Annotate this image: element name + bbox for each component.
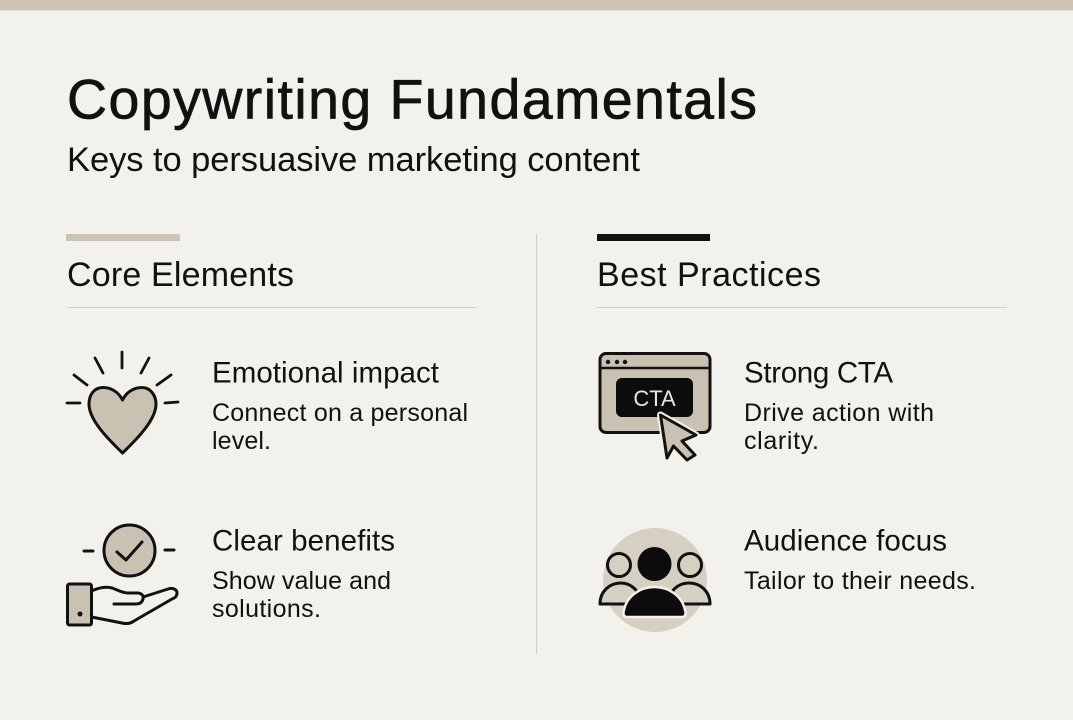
section accent rule: core elements — [66, 234, 180, 241]
section accent rule: best practices — [597, 234, 710, 241]
item: emotional impact: Emotional impact — [212, 356, 439, 390]
heading: best practices: Best Practices — [597, 256, 821, 294]
title: Copywriting Fundamentals — [67, 68, 757, 130]
item: audience focus: Tailor to their needs. — [744, 567, 976, 595]
icon: heart with rays — [67, 352, 178, 453]
icon: audience group — [600, 528, 710, 632]
icon: hand holding check — [68, 525, 177, 625]
item: clear benefits: Clear benefits — [212, 524, 395, 558]
item: clear benefits: solutions. — [212, 595, 321, 623]
item: clear benefits — [212, 524, 395, 623]
item: audience focus — [744, 524, 976, 595]
column divider — [536, 234, 537, 654]
item: emotional impact — [212, 356, 468, 455]
subtitle: Keys to persuasive marketing content — [67, 141, 640, 179]
panel: core elements — [66, 234, 477, 625]
icon: CTA browser window with cursor — [600, 354, 710, 460]
item: strong CTA: Drive action with — [744, 399, 934, 427]
item: strong CTA: clarity. — [744, 427, 819, 455]
heading: core elements: Core Elements — [67, 256, 294, 294]
top accent bar — [0, 0, 1073, 10]
item: strong CTA: Strong CTA — [744, 356, 893, 390]
item: emotional impact: level. — [212, 427, 271, 455]
item: emotional impact: Connect on a personal — [212, 399, 468, 427]
panel: best practices — [597, 234, 1007, 632]
icon: CTA browser window with cursor: CTA — [633, 386, 676, 411]
item: audience focus: Audience focus — [744, 524, 947, 558]
item: clear benefits: Show value and — [212, 567, 391, 595]
item: strong CTA — [744, 356, 934, 455]
